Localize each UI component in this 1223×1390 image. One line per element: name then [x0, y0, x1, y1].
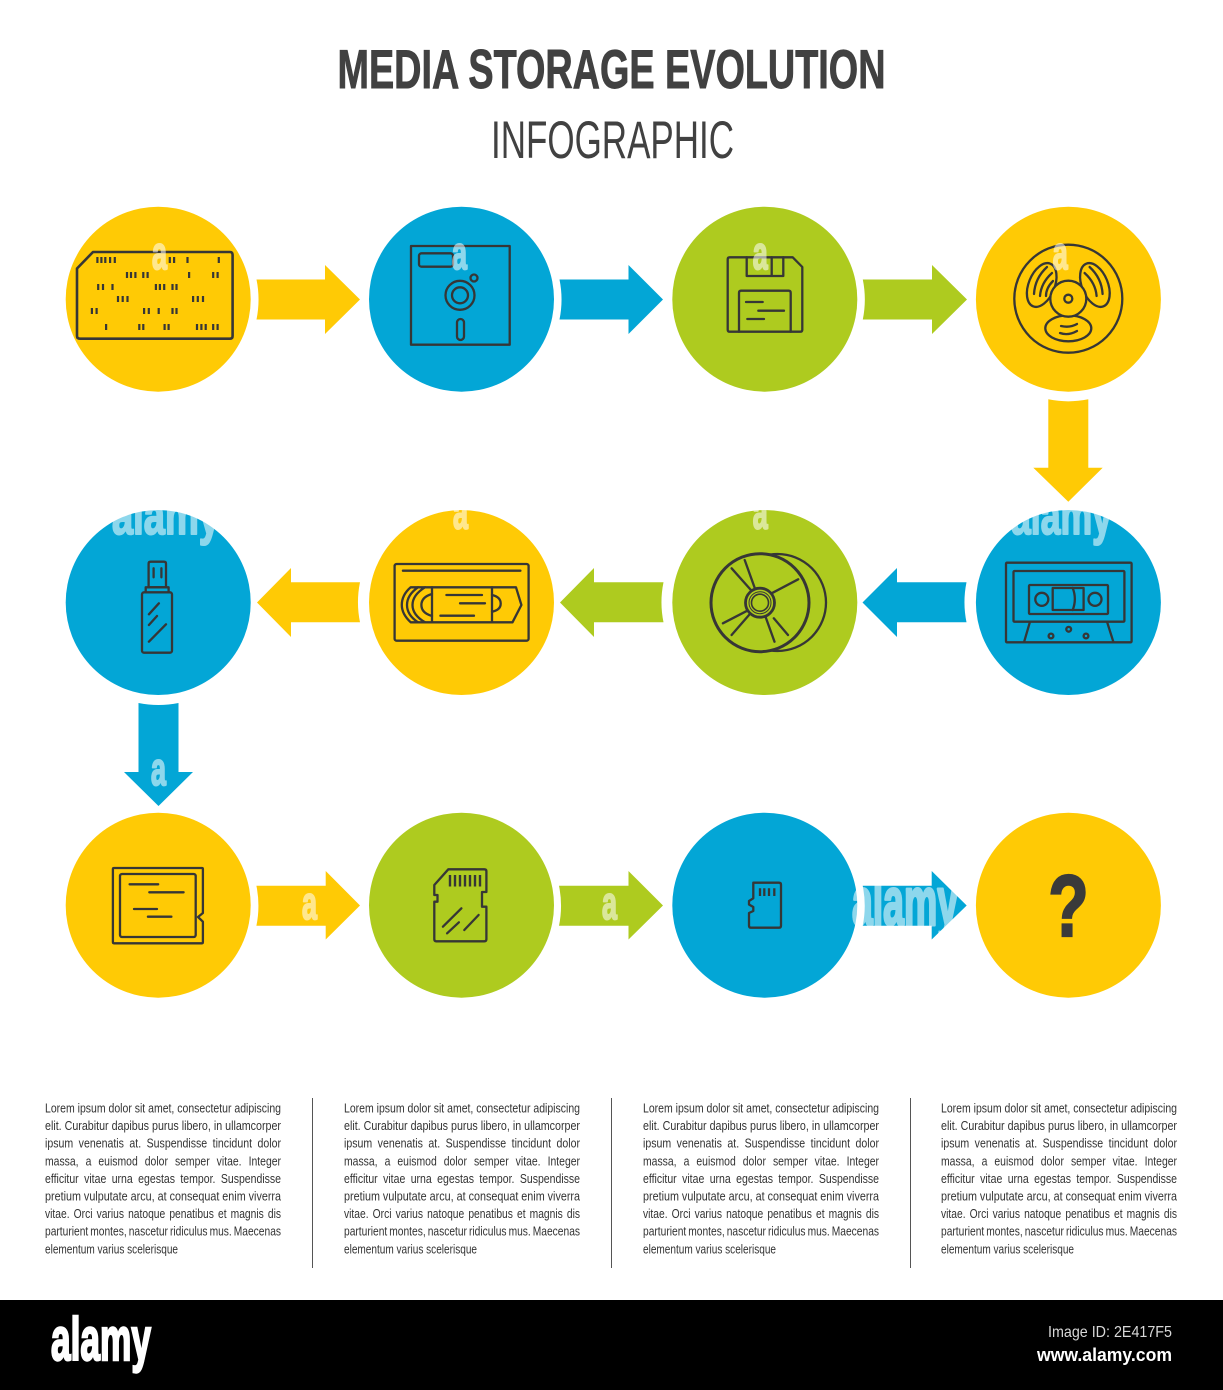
- arrow: blue right 2: [560, 265, 663, 334]
- text block: column 3: [643, 1102, 879, 1256]
- circle: compact disc background: [672, 510, 857, 695]
- icon: USB stick: [142, 562, 172, 653]
- text block: column 1: elementum varius scelerisque: [45, 1242, 178, 1256]
- watermark fragments: alamy: [852, 864, 958, 940]
- text block: column 1: ipsum venenatis at. Suspendisse tincidunt dolor: [45, 1137, 281, 1151]
- watermark fragments: a: [753, 486, 768, 538]
- icon: VHS tape: [395, 564, 529, 641]
- arrow: blue right row 3: [863, 871, 967, 940]
- text block: column 2: elementum varius scelerisque: [344, 1242, 477, 1256]
- text block: column 1: vitae. Orci varius natoque penatibus et magnis dis: [45, 1207, 281, 1221]
- circle: large floppy background: [369, 207, 554, 392]
- text block: column 4: vitae. Orci varius natoque penatibus et magnis dis: [941, 1207, 1177, 1221]
- text block: column 3: Lorem ipsum dolor sit amet, consectetur adipiscing: [643, 1102, 879, 1116]
- text block: column 4: ipsum venenatis at. Suspendisse tincidunt dolor: [941, 1137, 1177, 1151]
- arrow: yellow right 1: [256, 265, 360, 334]
- icon: audio cassette: [1006, 563, 1132, 642]
- text block: column 4: efficitur vitae urna egestas tempor. Suspendisse: [941, 1172, 1177, 1186]
- icon: question mark: ?: [1048, 858, 1089, 955]
- text block: column 2: massa, a euismod dolor semper vitae. Integer: [344, 1154, 580, 1168]
- title: MEDIA STORAGE EVOLUTION: [338, 38, 886, 100]
- watermark fragments: a: [302, 877, 317, 929]
- text block: column 1: [45, 1102, 281, 1256]
- footer url: www.alamy.com: [1036, 1345, 1172, 1365]
- footer logo: alamy: [51, 1306, 151, 1373]
- subtitle: INFOGRAPHIC: [491, 111, 734, 170]
- circle: floppy disk background: [672, 207, 857, 392]
- arrow: yellow right row 3: [256, 871, 360, 940]
- icon: 3.5-inch floppy: [728, 257, 802, 332]
- watermark fragments: [112, 227, 1112, 940]
- text block: column 2: pretium vulputate arcu, at consequat enim viverra: [344, 1190, 580, 1204]
- watermark fragments: a: [152, 227, 167, 279]
- watermark fragments: a: [452, 227, 467, 279]
- text block: column 2: elit. Curabitur dapibus purus libero, in ullamcorper: [344, 1119, 580, 1133]
- text block: column 1: massa, a euismod dolor semper vitae. Integer: [45, 1154, 281, 1168]
- circle: question mark background: [976, 813, 1161, 998]
- text block: column 3: parturient montes, nascetur ridiculus mus. Maecenas: [643, 1225, 879, 1239]
- text block: column 4: massa, a euismod dolor semper vitae. Integer: [941, 1154, 1177, 1168]
- text block: column 4: parturient montes, nascetur ridiculus mus. Maecenas: [941, 1225, 1177, 1239]
- circle: SD card background: [369, 813, 554, 998]
- arrow: green left: [560, 568, 664, 637]
- watermark fragments: a: [151, 743, 166, 795]
- text block: column 3: elit. Curabitur dapibus purus libero, in ullamcorper: [643, 1119, 879, 1133]
- text block: column 2: ipsum venenatis at. Suspendisse tincidunt dolor: [344, 1137, 580, 1151]
- circle: punched card background: [66, 207, 251, 392]
- arrow: green right row 3: [559, 871, 663, 940]
- text block: column 2: [344, 1102, 580, 1256]
- text block: column 4: elit. Curabitur dapibus purus libero, in ullamcorper: [941, 1119, 1177, 1133]
- icon: compact flash card: [113, 868, 203, 943]
- watermark fragments: a: [602, 877, 617, 929]
- watermark fragments: a: [753, 227, 768, 279]
- text block: column 4: elementum varius scelerisque: [941, 1242, 1074, 1256]
- text block: column 3: efficitur vitae urna egestas tempor. Suspendisse: [643, 1172, 879, 1186]
- text block: column 2: efficitur vitae urna egestas tempor. Suspendisse: [344, 1172, 580, 1186]
- arrow: yellow left: [257, 568, 360, 637]
- circle: VHS background: [369, 510, 554, 695]
- watermark fragments: alamy: [112, 486, 220, 546]
- circle: cassette background: [976, 510, 1161, 695]
- icon: SD card: [434, 869, 486, 941]
- arrow: blue left: [862, 568, 966, 637]
- footer band: [0, 1300, 1223, 1390]
- text block: column 2: vitae. Orci varius natoque penatibus et magnis dis: [344, 1207, 580, 1221]
- text block: column 4: pretium vulputate arcu, at consequat enim viverra: [941, 1190, 1177, 1204]
- text block: column 2: Lorem ipsum dolor sit amet, consectetur adipiscing: [344, 1102, 580, 1116]
- text block: column 3: massa, a euismod dolor semper vitae. Integer: [643, 1154, 879, 1168]
- arrow: yellow down: [1033, 399, 1103, 502]
- icon: film reel: [1014, 245, 1122, 353]
- icon: 8-inch floppy: [411, 246, 510, 345]
- arrow: blue down: [124, 703, 193, 806]
- footer image id: Image ID: 2E417F5: [1048, 1324, 1172, 1341]
- icon: micro SD card: [749, 883, 781, 928]
- arrow: green right 3: [863, 265, 967, 334]
- text block: column 1: efficitur vitae urna egestas tempor. Suspendisse: [45, 1172, 281, 1186]
- text block: column 4: Lorem ipsum dolor sit amet, consectetur adipiscing: [941, 1102, 1177, 1116]
- text block: column 1: elit. Curabitur dapibus purus libero, in ullamcorper: [45, 1119, 281, 1133]
- circle: micro SD background: [672, 813, 857, 998]
- text block: column 3: ipsum venenatis at. Suspendisse tincidunt dolor: [643, 1137, 879, 1151]
- circle: compact flash background: [66, 813, 251, 998]
- circle: USB background: [66, 510, 251, 695]
- watermark fragments: alamy: [1011, 486, 1112, 546]
- text block: column 3: pretium vulputate arcu, at consequat enim viverra: [643, 1190, 879, 1204]
- text block: column 1: Lorem ipsum dolor sit amet, consectetur adipiscing: [45, 1102, 281, 1116]
- icon: compact disc: [711, 554, 826, 652]
- circle: reel background: [976, 207, 1161, 392]
- text block: column 3: vitae. Orci varius natoque penatibus et magnis dis: [643, 1207, 879, 1221]
- text block: column 4: [941, 1102, 1177, 1256]
- icon: punched card: [77, 252, 233, 339]
- text block: column 2: parturient montes, nascetur ridiculus mus. Maecenas: [344, 1225, 580, 1239]
- watermark fragments: a: [453, 486, 468, 538]
- watermark fragments: a: [1053, 227, 1068, 279]
- text block: column 1: parturient montes, nascetur ridiculus mus. Maecenas: [45, 1225, 281, 1239]
- text block: column 3: elementum varius scelerisque: [643, 1242, 776, 1256]
- text block: column 1: pretium vulputate arcu, at consequat enim viverra: [45, 1190, 281, 1204]
